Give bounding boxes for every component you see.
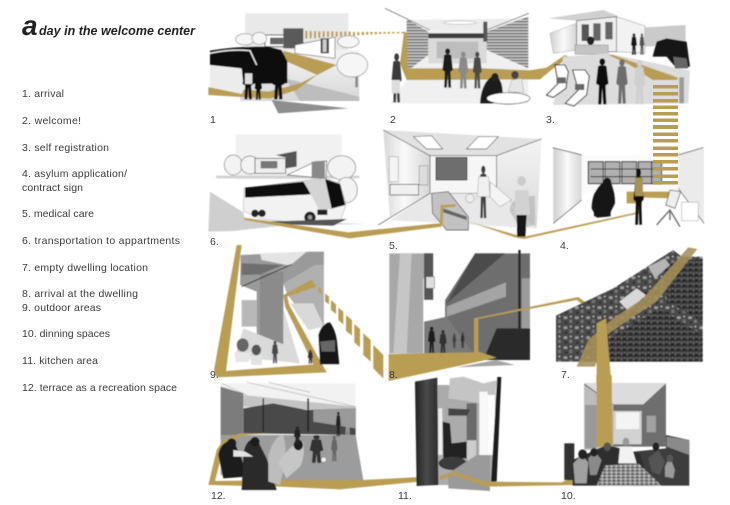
label: 2: 2 [390,114,396,126]
panel: 11 kitchen [415,377,573,491]
step list: 3. self registration [22,142,109,154]
icon: trees and building [224,151,357,203]
route: gold vertical link to 10 [597,318,612,387]
crowd waiting [631,33,690,68]
step list: 8. arrival at the dwelling [22,288,138,300]
step list: 12. terrace as a recreation space [22,382,177,394]
queue of people [596,58,645,104]
icon: modern building [265,28,335,58]
seated family [564,435,689,486]
people arriving [243,65,285,100]
child [272,341,278,363]
route: dashed link to step 2 [305,31,405,39]
label: 7: 7. [561,369,570,381]
panel: 10 dinning spaces [564,375,689,486]
step list: 6. transportation to appartments [22,235,180,247]
label: 5: 5. [389,240,398,252]
step list: 10. dinning spaces [22,328,110,340]
label: 3: 3. [546,114,555,126]
label: 8: 8. [389,369,398,381]
step list: contract sign [22,182,83,194]
panel: 3 self registration [547,10,690,106]
icon: registration kiosks [547,65,589,106]
route: gold vertical link [597,375,613,447]
shadow [457,360,515,367]
icon: office chair [657,190,698,227]
windows [588,162,662,184]
dark panel right [491,377,501,482]
route: gold band [208,51,337,99]
route: gold band [208,433,440,489]
title [22,10,196,41]
icon: ceiling lights [413,136,498,149]
label: 4: 4. [560,240,569,252]
panel: 8 arrival at the dwelling [389,250,607,381]
route: gold band from 6 to 5 [243,218,442,238]
route: dashed gold link [318,287,383,378]
label: 10: 10. [561,490,576,502]
step list: 5. medical care [22,208,94,220]
label: 11: 11. [398,490,412,502]
route: gold band to stripes [608,55,677,80]
panel: 12 terrace [208,382,440,490]
label: 6: 6. [210,236,219,248]
route: gold band around bed [440,190,678,239]
step list: 1. arrival [22,88,64,100]
visitors [392,48,482,102]
step list: 4. asylum application/ [22,168,127,180]
route: gold band [389,297,607,381]
route: translucent road [577,247,697,367]
gray post [679,77,684,103]
step list: 2. welcome! [22,115,81,127]
icon: examination bed [432,192,468,230]
step list: 7. empty dwelling location [22,262,148,274]
doctor [466,166,490,218]
step list [22,88,180,394]
icon: trees [236,32,368,87]
children playing [294,410,351,463]
dining table with food [597,463,662,486]
dark panel left [415,378,438,486]
mother and child seated [308,322,339,364]
panel: 2 welcome [385,8,569,104]
panel: 7 empty dwelling location [556,247,703,387]
table with two people [480,71,530,104]
panel: 1 arrival [208,13,405,113]
seated person [592,178,615,218]
route: vertical gold stripes between 3 and 4 [653,85,678,184]
patient [510,176,535,237]
label: 1: 1 [210,114,216,126]
panel: 9 outdoor areas [214,245,383,378]
step list: 11. kitchen area [22,355,98,367]
route: gold band [440,472,573,487]
people in street [428,327,465,354]
title: day in the welcome center [39,24,196,38]
panel: 5 medical care [378,130,678,239]
icon: coach bus [243,178,347,226]
title: a [22,10,38,41]
panel: 6 transportation [208,134,442,238]
standing person [634,168,644,225]
label: 12: 12. [211,490,226,502]
step list: 9. outdoor areas [22,302,101,314]
route: gold band [400,32,569,80]
people seated [218,435,304,490]
route: gold frame path [214,245,327,377]
potted plants [234,338,263,365]
icon: coach bus [210,47,287,94]
panel: 4 asylum application [553,148,704,227]
label: 9: 9. [210,369,219,381]
